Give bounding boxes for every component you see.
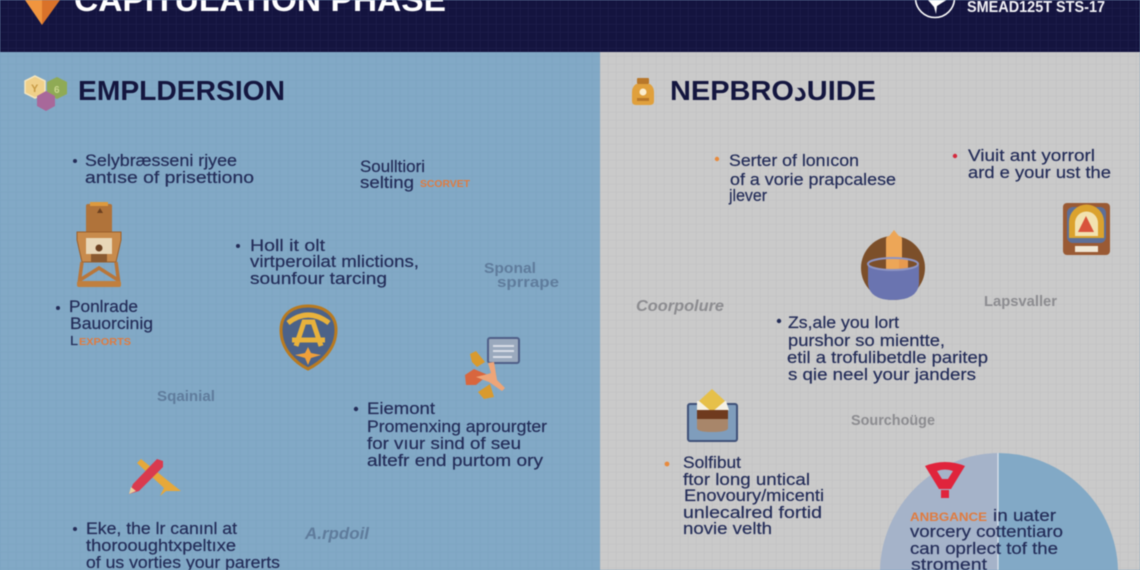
label: Sponal sprrape: Sponal <box>484 260 536 277</box>
text block: left item 3 <box>236 236 419 288</box>
label: Coorpolure: Coorpolure <box>636 298 724 315</box>
text block: right item 4: novie velth <box>683 519 772 538</box>
text block: left item 5: altefr end purtom ory <box>367 451 544 470</box>
text block: left item 6: Eke, the lr canınl at <box>86 519 237 538</box>
text block: right item 1: jlever <box>728 186 767 205</box>
text block: left item 3: Holl it olt <box>250 236 325 255</box>
text block: right item 4: Enovoury/micenti <box>684 486 824 505</box>
icon: red signal marker <box>925 462 965 498</box>
text block: right item 2: ard e your ust the <box>968 163 1111 182</box>
panel: left section background <box>0 52 600 570</box>
icon: framed picture <box>1063 203 1110 255</box>
panel: right section background <box>600 52 1140 570</box>
text block: left item 6: thorooughtxpeltıxe <box>86 536 236 555</box>
icon: blue bowl with orange sticks <box>861 230 925 300</box>
text block: right item 3: Zs,ale you lort <box>788 313 899 332</box>
callout text: in uater <box>993 506 1056 525</box>
heading: left section: EMPLDERSION <box>78 75 285 106</box>
text block: left item 5: Promenxing aprourgter <box>367 417 547 436</box>
text block: right item 2: Viuit ant yorrorl <box>968 146 1095 165</box>
text block: left item 1: Selybræsseni rjyee <box>85 151 237 170</box>
text block: right item 4: Solfibut <box>683 453 741 472</box>
label: Lapsvaller: Lapsvaller <box>984 293 1057 310</box>
text block: right item 1 <box>715 151 896 205</box>
callout text: ANBGANCE <box>910 510 987 524</box>
text block: left item 4: Bauorcinig <box>70 314 153 333</box>
text block: left item 3: virtperoilat mlictions, <box>250 252 419 271</box>
text block: left item 5: for vıur sind of seu <box>367 434 521 453</box>
icon: three hexagon badges: 6 <box>54 85 60 96</box>
text block: left item 3: sounfour tarcing <box>250 269 387 288</box>
text block: left item 2 <box>360 157 470 192</box>
callout text: vorcery cottentiaro <box>910 522 1063 541</box>
icon: leaves and message card <box>465 338 519 399</box>
text block: right item 3 <box>777 313 988 384</box>
text block: left item 4: EXPORTS <box>79 337 131 348</box>
icon: pencil and ruler <box>129 459 181 496</box>
text block: right item 1: of a vorie prapcalese <box>730 170 896 189</box>
callout text <box>910 506 1063 570</box>
text block: right item 4: unlecalred fortid <box>683 503 822 522</box>
text block: left item 2: SCORVET <box>420 179 470 190</box>
text block: left item 4: L <box>70 333 78 348</box>
text block: right item 4: ftor long untical <box>683 470 810 489</box>
icon: layered box with gold diamond <box>688 389 737 441</box>
text block: left item 1: antıse of prisettiono <box>85 168 254 187</box>
label: Sqainial: Sqainial <box>157 388 215 405</box>
icon: bronze chair machine <box>77 202 121 287</box>
icon: three hexagon badges <box>25 76 67 111</box>
icon: gold shield <box>281 306 336 369</box>
icon: orange gem logo <box>25 0 60 25</box>
label: Sponal sprrape: sprrape <box>497 274 559 291</box>
text block: left item 5: Eiemont <box>367 399 435 418</box>
label: A.rpdoil: A.rpdoil <box>304 524 370 543</box>
text block: left item 4: Ponlrade <box>69 297 138 316</box>
text block: right item 2 <box>953 146 1111 182</box>
icon: circled arrow badge <box>916 0 954 18</box>
text block: left item 5 <box>354 399 547 470</box>
heading: right section: NEPBROدUIDE <box>670 75 876 106</box>
label: Sourchoüge: Sourchoüge <box>851 412 935 429</box>
icon: jar <box>632 78 654 105</box>
icon: three hexagon badges: Y <box>31 83 39 95</box>
text block: right item 3: etil a trofulibetdle paritep <box>787 348 988 367</box>
text block: left item 1 <box>73 151 254 187</box>
text block: right item 4 <box>665 453 824 538</box>
text block: left item 4 <box>56 297 153 348</box>
text block: left item 2: Soulltiori <box>360 157 425 176</box>
callout text: can oprlect tof the <box>910 539 1058 558</box>
label: Sponal sprrape <box>484 260 559 291</box>
text block: right item 3: s qie neel your janders <box>788 365 976 384</box>
text block: left item 6 <box>73 519 280 570</box>
text block: right item 3: purshor so mientte, <box>788 331 945 350</box>
header banner <box>0 0 1140 52</box>
text block: left item 2: selting <box>360 173 414 192</box>
text block: right item 1: Serter of lonıcon <box>729 151 859 170</box>
chart: split circle <box>880 453 1118 570</box>
